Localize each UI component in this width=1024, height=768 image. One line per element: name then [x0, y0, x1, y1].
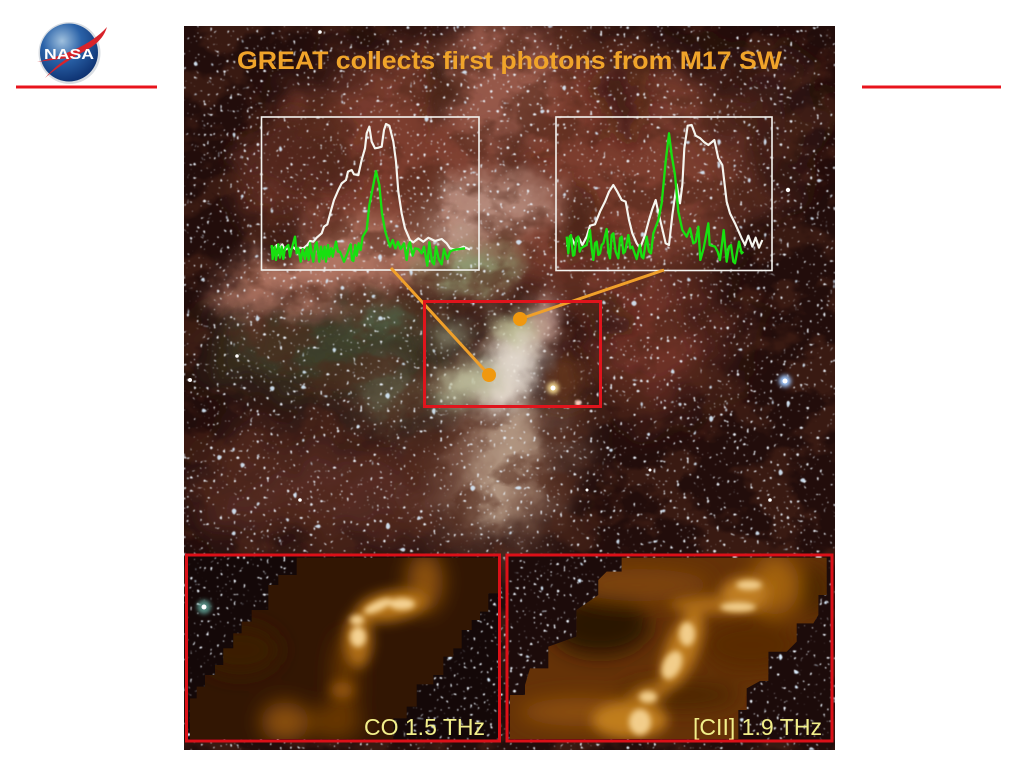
icon: NASA logo [37, 22, 107, 84]
header rule right [862, 86, 1001, 88]
label: [CII] 1.9 THz: [CII] 1.9 THz [693, 714, 822, 740]
callout: mapped region box [424, 302, 600, 406]
icon: bright star [197, 600, 211, 614]
label: CO 1.5 THz: CO 1.5 THz [364, 714, 485, 740]
spectrum lines [567, 125, 762, 263]
panel: CO 1.5 THz map [186, 552, 500, 742]
arrow: leader line to right position [513, 270, 664, 326]
panel: left spectrum [262, 117, 479, 270]
arrow: leader line to left position [391, 268, 496, 382]
header rule left [16, 86, 157, 88]
icon: NASA logo: NASA [44, 46, 94, 63]
panel: M17 SW nebula image [180, 20, 835, 750]
bright stars [188, 30, 791, 502]
spectrum lines [272, 124, 470, 266]
title: GREAT collects first photons from M17 SW [237, 47, 782, 75]
panel: right spectrum [556, 117, 772, 270]
panel: [CII] 1.9 THz map [506, 554, 834, 742]
